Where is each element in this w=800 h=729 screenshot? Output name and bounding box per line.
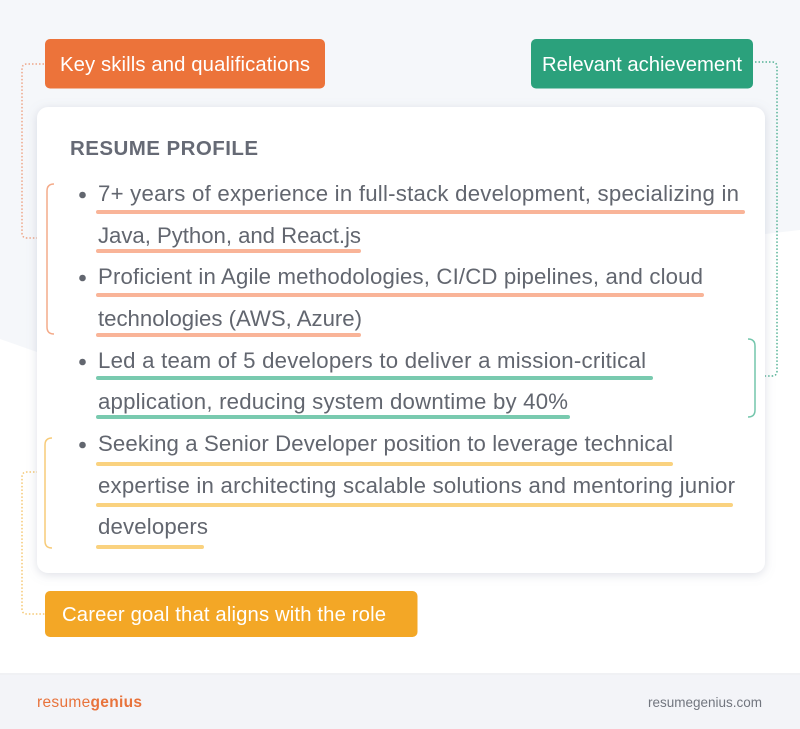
- bullet text: career goal: [98, 431, 736, 539]
- connector: achievement: [755, 62, 777, 376]
- bullet text: experience: 7+ years of experience in full-stack development, specializing in: [98, 181, 739, 206]
- bullet text: career goal: expertise in architecting scalable solutions and mentoring junior: [98, 473, 736, 498]
- footer url: resumegenius.com: [648, 695, 762, 710]
- tag: relevant achievement: Relevant achievement: [542, 54, 742, 76]
- connector: skills: [22, 64, 47, 238]
- underlines: skills: [98, 212, 743, 335]
- bullet text: experience: Java, Python, and React.js: [98, 223, 361, 248]
- bracket: skills: [47, 184, 54, 334]
- bullet text: proficiency: technologies (AWS, Azure): [98, 306, 362, 331]
- bullet text: achievement: application, reducing system downtime by 40%: [98, 389, 568, 414]
- footer logo: resumegenius: [37, 694, 142, 711]
- bullet text: achievement: [98, 348, 646, 414]
- bracket: achievement: [748, 339, 755, 417]
- underlines: career goal: [98, 464, 731, 547]
- bullet text: career goal: Seeking a Senior Developer position to leverage technical: [98, 431, 673, 456]
- tag: career goal: Career goal that aligns with the role: [62, 604, 386, 626]
- bracket: career goal: [45, 438, 52, 548]
- bullets: [79, 192, 86, 448]
- underlines: achievement: [98, 378, 651, 417]
- bullet text: career goal: developers: [98, 514, 208, 539]
- panel: resume profile card: [37, 107, 765, 573]
- bullet text: achievement: Led a team of 5 developers to deliver a mission-critical: [98, 348, 646, 373]
- bullet text: proficiency: [98, 264, 703, 331]
- tag: key skills: [45, 39, 325, 88]
- connector: career goal: [22, 472, 45, 614]
- tag: key skills: Key skills and qualifications: [60, 54, 310, 76]
- tag: career goal: [45, 591, 418, 637]
- tag: relevant achievement: [531, 39, 753, 88]
- heading: RESUME PROFILE: [70, 137, 258, 160]
- bullet text: proficiency: Proficient in Agile methodologies, CI/CD pipelines, and cloud: [98, 264, 703, 289]
- bullet text: experience: [98, 181, 739, 248]
